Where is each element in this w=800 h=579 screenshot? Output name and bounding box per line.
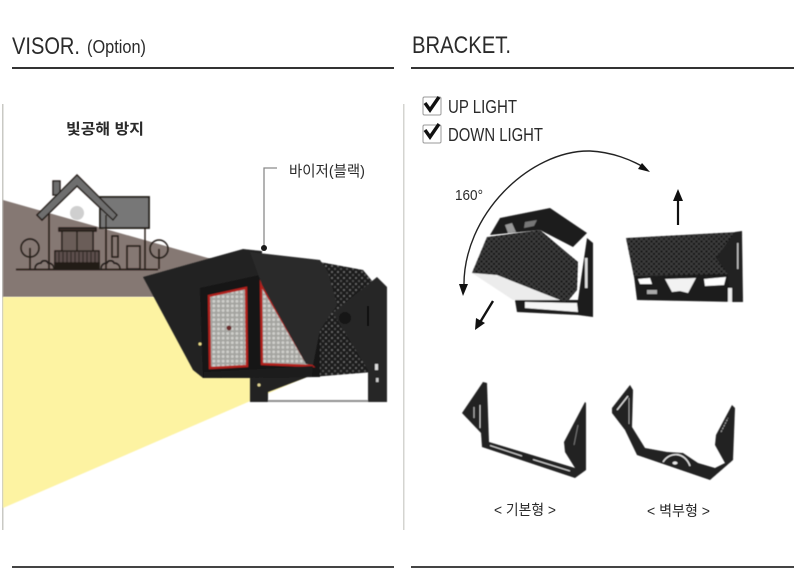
arrow: 160 degree rotation arc — [459, 151, 650, 296]
label: basic type: < 기본형 > — [494, 502, 556, 519]
heading: VISOR: VISOR. — [12, 33, 80, 60]
icon: floodlight with visor — [143, 249, 387, 402]
icon: house — [16, 175, 168, 270]
heading: VISOR: (Option) — [87, 37, 146, 57]
label: light pollution prevention: 빛공해 방지 — [66, 121, 144, 138]
heading: BRACKET: BRACKET. — [412, 32, 511, 59]
callout: visor black: 바이저(블랙) — [289, 163, 365, 180]
checkbox: up light: UP LIGHT — [448, 97, 517, 117]
checkbox: down light: DOWN LIGHT — [448, 125, 543, 145]
callout: visor black — [261, 163, 365, 251]
icon: wall-mount bracket — [612, 385, 735, 480]
label: wall type: < 벽부형 > — [647, 503, 710, 520]
arrow: up direction — [673, 189, 683, 225]
icon: floodlight tilted down — [472, 208, 593, 317]
checkbox: down light — [423, 124, 543, 145]
panel: bracket options — [423, 97, 743, 520]
icon: floodlight tilted up — [626, 231, 743, 302]
checkbox: up light — [423, 97, 517, 117]
icon: basic bracket — [462, 382, 586, 478]
arrow: down-left direction — [475, 301, 493, 330]
panel: visor light-pollution illustration — [3, 121, 387, 508]
heading: VISOR — [12, 33, 146, 60]
shadow wedge — [3, 200, 215, 297]
light beam — [3, 297, 306, 508]
label: 160 degrees: 160° — [455, 187, 483, 204]
